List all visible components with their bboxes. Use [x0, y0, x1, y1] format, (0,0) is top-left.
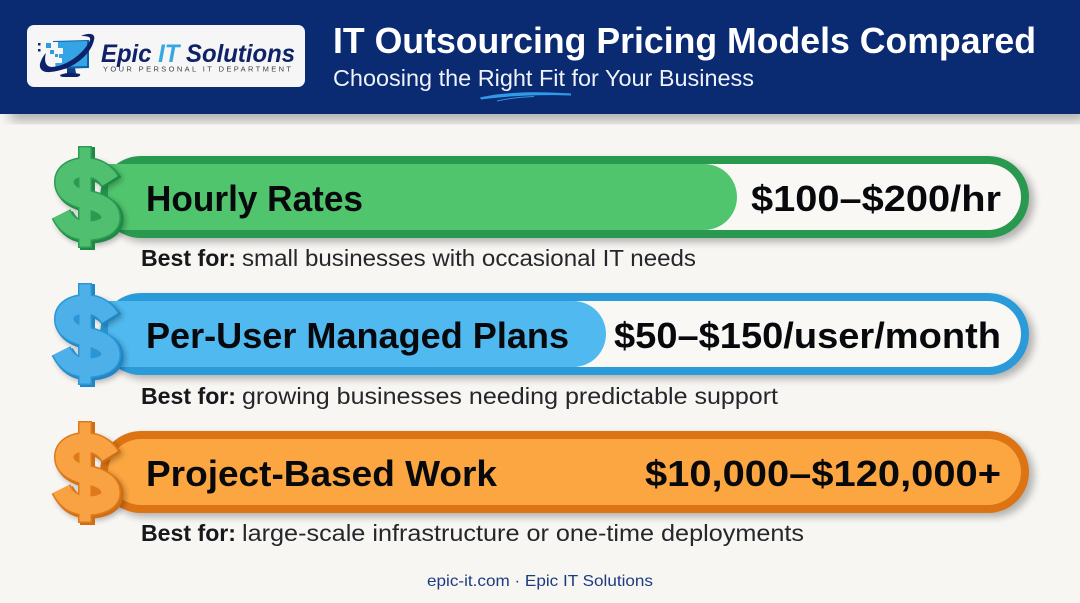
icon: blue dollar sign [61, 283, 114, 387]
price: $100–$200/hr [751, 178, 1001, 219]
bar fill: blue [108, 301, 606, 367]
name: Project-Based Work [146, 453, 498, 494]
logo tagline: YOUR PERSONAL IT DEPARTMENT [103, 64, 291, 74]
subtitle underline swoosh [480, 92, 571, 102]
title: IT Outsourcing Pricing Models Compared [333, 20, 1036, 61]
footer: epic-it.com · Epic IT Solutions [427, 573, 653, 590]
text: best for hourly: small businesses with occasional IT needs [242, 245, 696, 271]
logo name: Epic IT Solutions [101, 40, 295, 68]
name: Per-User Managed Plans [146, 315, 569, 356]
text: best for project: Best for: [141, 520, 236, 546]
panel: project-based work [61, 421, 1034, 525]
name: Hourly Rates [146, 178, 363, 219]
bar fill: green [108, 164, 737, 230]
subtitle: Choosing the Right Fit for Your Business [333, 65, 754, 91]
price: $50–$150/user/month [614, 315, 1001, 356]
price: $10,000–$120,000+ [645, 453, 1001, 494]
panel: per-user managed plans [61, 283, 1034, 387]
text: best for per-user: Best for: [141, 383, 236, 409]
text: best for project: large-scale infrastructure or one-time deployments [242, 520, 804, 546]
bar fill: orange [108, 439, 1021, 505]
panel: hourly rates [61, 146, 1034, 250]
text: best for hourly: Best for: [141, 245, 236, 271]
logo card [27, 25, 305, 87]
icon: green dollar sign [61, 146, 114, 250]
icon: computer monitor with swoosh [38, 34, 94, 77]
text: best for per-user: growing businesses needing predictable support [242, 383, 779, 409]
header band [0, 0, 1080, 120]
icon: orange dollar sign [61, 421, 114, 525]
